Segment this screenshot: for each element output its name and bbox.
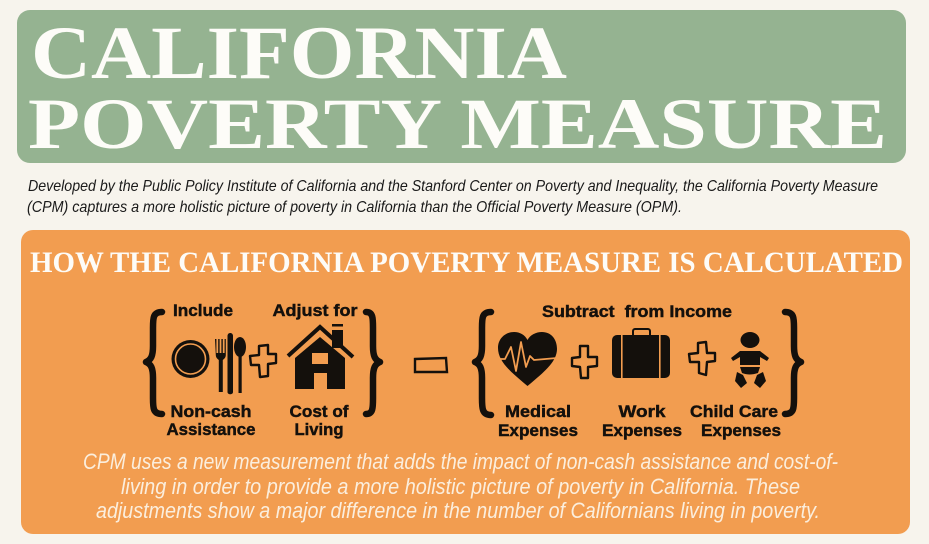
label: child care expenses: Expenses — [701, 421, 781, 440]
label: work expenses: Expenses — [602, 421, 682, 440]
intro text block — [27, 178, 878, 216]
intro text block: (CPM) captures a more holistic picture of poverty in California than the Official Poverty Measure (OPM). — [27, 199, 682, 216]
label: work expenses: Work — [618, 402, 666, 421]
left brace group opening — [146, 312, 162, 414]
label: medical expenses: Medical — [505, 402, 571, 421]
icon: house — [288, 324, 353, 389]
label: subtract from income: Subtract from Income — [542, 302, 732, 321]
right brace group opening — [475, 312, 491, 415]
label: cost of living: Cost of — [290, 402, 349, 421]
icon: briefcase — [612, 329, 670, 378]
icon: minus — [415, 358, 447, 372]
title line 2: POVERTY MEASURE — [28, 84, 887, 164]
label: child care expenses — [690, 402, 781, 440]
icon: baby — [731, 332, 769, 388]
label: medical expenses — [498, 402, 578, 440]
label: non-cash assistance — [166, 402, 256, 439]
panel: title banner — [17, 10, 906, 164]
icon: plus — [572, 346, 597, 378]
title line 1: CALIFORNIA — [31, 12, 567, 95]
panel: how it is calculated — [21, 230, 910, 534]
icon: plate and cutlery — [172, 333, 246, 394]
label: child care expenses: Child Care — [690, 402, 778, 421]
label: medical expenses: Expenses — [498, 421, 578, 440]
label: work expenses — [602, 402, 682, 440]
explanatory text block: CPM uses a new measurement that adds the impact of non-cash assistance and cost-of- — [83, 449, 838, 474]
icon: plus — [250, 345, 276, 377]
explanatory text block — [83, 449, 838, 523]
icon: heart with pulse — [498, 332, 557, 386]
explanatory text block: living in order to provide a more holistic picture of poverty in California. These — [121, 474, 800, 499]
label: cost of living — [290, 402, 349, 439]
explanatory text block: adjustments show a major difference in the number of Californians living in poverty. — [96, 498, 820, 523]
right brace group closing — [785, 312, 801, 414]
label: include: Include — [173, 301, 233, 320]
label: non-cash assistance: Assistance — [166, 420, 256, 439]
icon: plus — [689, 342, 715, 375]
left brace group closing — [366, 312, 380, 414]
panel heading: HOW THE CALIFORNIA POVERTY MEASURE IS CALCULATED — [30, 246, 903, 279]
label: cost of living: Living — [294, 420, 344, 439]
label: adjust for: Adjust for — [272, 301, 358, 320]
label: non-cash assistance: Non-cash — [170, 402, 252, 421]
